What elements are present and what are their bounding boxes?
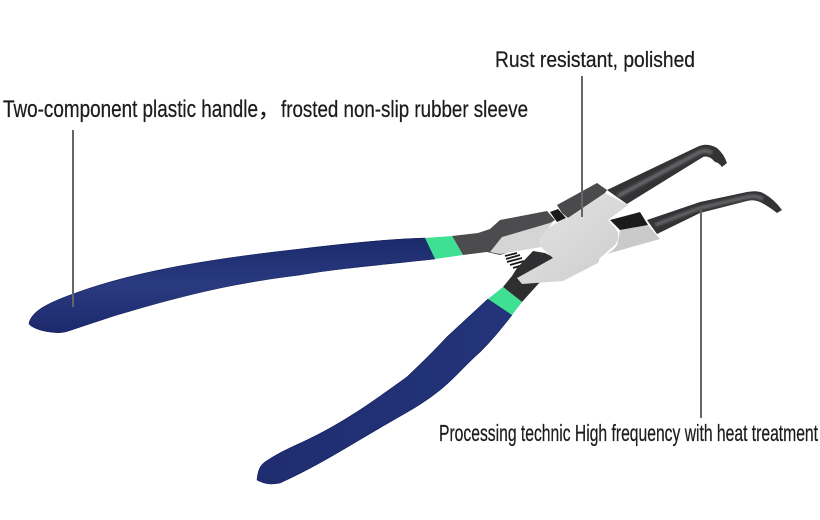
icon: lower arm dark section [503,251,555,302]
icon: right jaw black block [610,212,648,230]
label: handle: Two-component plastic handle [3,96,258,123]
icon: top handle green band [425,236,463,259]
label: handle: frosted non-slip rubber sleeve [281,96,528,122]
icon: lower handle [257,299,512,484]
icon: small black joint [550,209,566,222]
icon: central steel pivot plate [517,193,628,284]
label: rust resistant: Rust resistant, polished [495,47,695,72]
icon: top handle dark neck [452,211,555,255]
icon: right jaw steel plate [607,225,660,254]
icon: upper jaw arm [607,145,727,204]
icon: spring [505,253,526,268]
icon: lower jaw arm [647,191,782,234]
annotation line: rust resistant [581,76,583,217]
label: handle [3,96,528,123]
annotation line: handle [72,130,74,307]
annotation line: heat treatment [700,210,702,418]
label: handle: ， [258,97,280,122]
icon: upper dark pivot block [557,183,607,218]
icon: left jaw steel plate [490,222,553,254]
icon: top handle [29,238,435,333]
icon: lower handle green band [488,287,522,315]
